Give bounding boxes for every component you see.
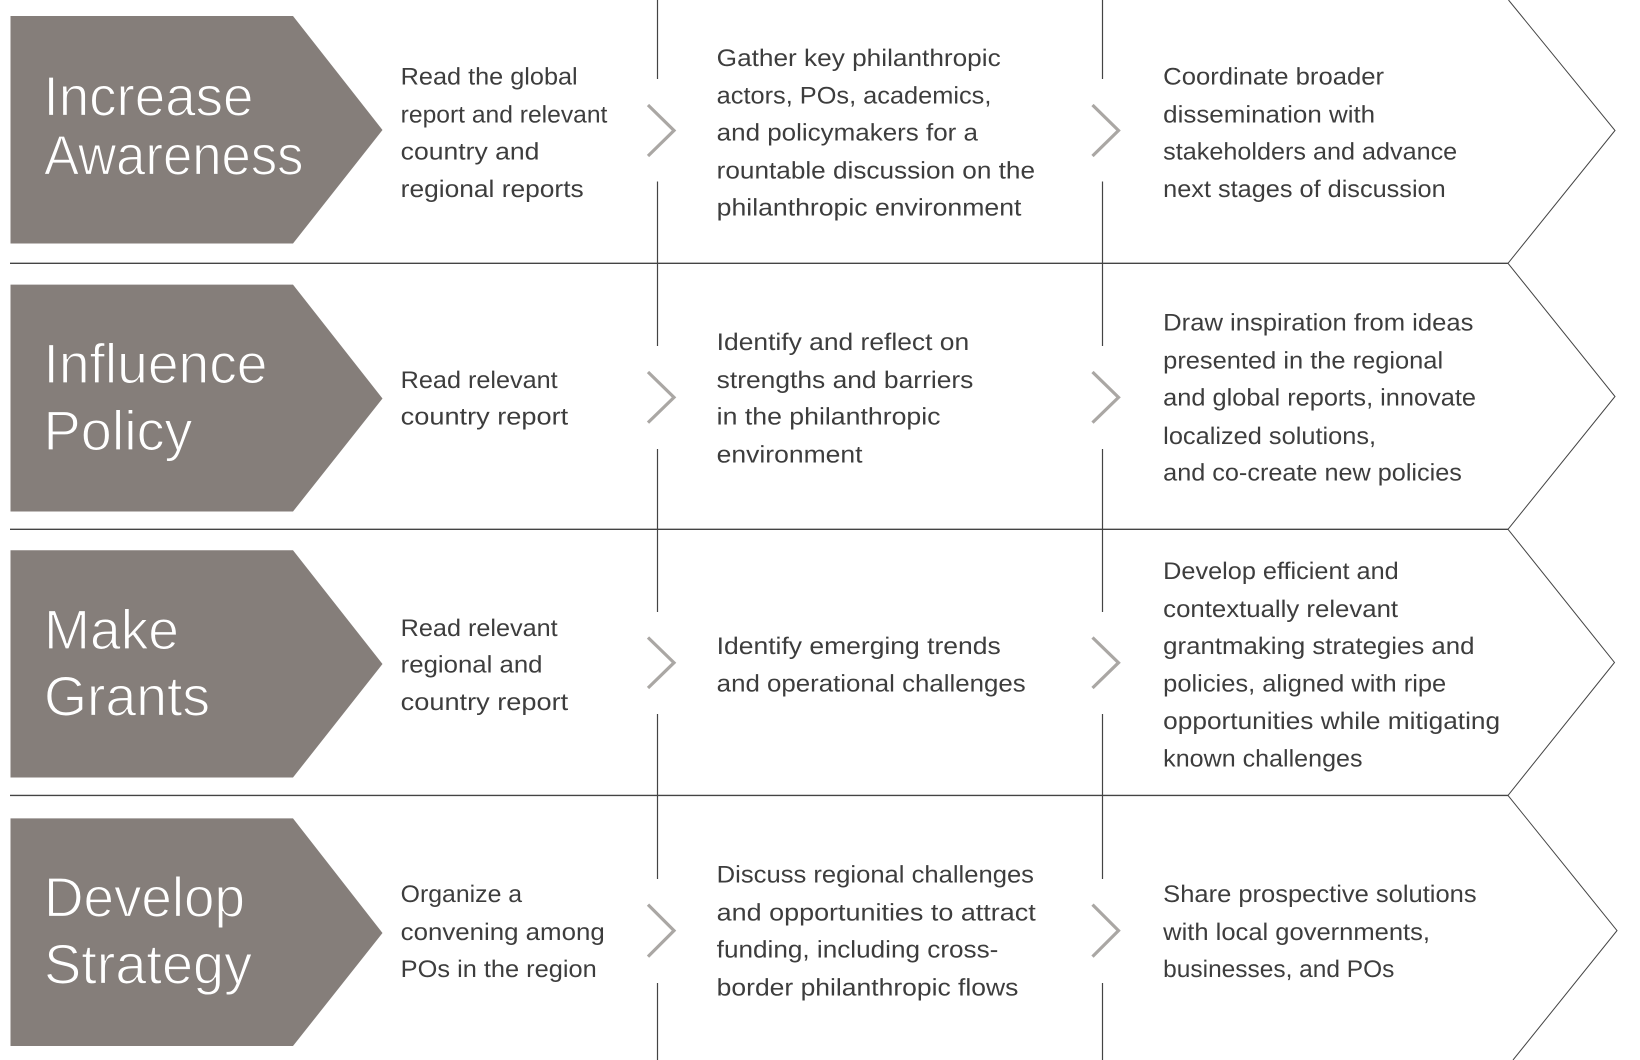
arrow: step one to two (648, 105, 674, 156)
text: step three: and co-create new policies (1163, 459, 1462, 486)
label: Influence Policy: Policy (44, 399, 192, 462)
arrow: step one to two (648, 372, 674, 423)
text: step three: Draw inspiration from ideas (1163, 310, 1473, 337)
text: step two (717, 633, 1026, 698)
text: step one: convening among (401, 919, 605, 946)
text: step three: known challenges (1163, 746, 1362, 773)
label: Make Grants: Make (44, 598, 179, 661)
text: step two: Discuss regional challenges (717, 862, 1034, 889)
text: step three: stakeholders and advance (1163, 139, 1457, 166)
outline arrow: row two (1508, 263, 1615, 529)
text: step two (717, 329, 973, 468)
label: Increase Awareness: Awareness (44, 124, 304, 187)
text: step one: country report (401, 403, 569, 430)
text: step two: rountable discussion on the (717, 158, 1035, 184)
row: Increase Awareness (10, 0, 1615, 263)
label: Develop Strategy: Strategy (44, 933, 252, 996)
outline arrow: row one (1508, 0, 1615, 263)
arrow: step two to three (1092, 105, 1118, 156)
text: step three (1163, 64, 1457, 203)
label: Increase Awareness: Increase (44, 64, 254, 127)
text: step one: Read relevant (401, 367, 558, 394)
text: step one: POs in the region (401, 956, 597, 983)
text: step three: and global reports, innovate (1163, 385, 1476, 412)
text: step one (401, 367, 569, 430)
text: step three (1163, 558, 1500, 773)
text: step two (717, 862, 1036, 1002)
label: Influence Policy: Influence (44, 332, 268, 395)
text: step two: and operational challenges (717, 671, 1026, 698)
outline arrow: row four (1508, 795, 1617, 1060)
row: Make Grants (10, 529, 1614, 795)
text: step three: policies, aligned with ripe (1163, 671, 1446, 698)
label: Make Grants: Grants (44, 665, 210, 728)
text: step two: philanthropic environment (717, 195, 1022, 222)
text: step two: in the philanthropic (717, 404, 940, 431)
text: step three: grantmaking strategies and (1163, 633, 1474, 660)
text: step two: Gather key philanthropic (717, 45, 1001, 72)
text: step three: opportunities while mitigating (1163, 708, 1500, 735)
text: step one: Read the global (401, 64, 578, 90)
text: step one: country and (401, 139, 539, 166)
text: step one: regional and (401, 652, 542, 679)
text: step two: and policymakers for a (717, 120, 979, 147)
row: Develop Strategy (10, 795, 1617, 1060)
text: step three: dissemination with (1163, 101, 1375, 128)
text: step three: contextually relevant (1163, 596, 1398, 623)
text: step three: businesses, and POs (1163, 956, 1394, 983)
text: step two: environment (717, 442, 863, 468)
text: step three (1163, 310, 1476, 486)
label: Develop Strategy: Develop (44, 866, 245, 929)
text: step three (1162, 881, 1477, 983)
arrow: step two to three (1092, 905, 1118, 957)
text: step one (401, 881, 605, 983)
text: step three: Share prospective solutions (1163, 881, 1477, 908)
arrow: step one to two (648, 638, 674, 688)
label: Influence Policy (10, 285, 382, 512)
text: step one (401, 615, 569, 716)
label: Develop Strategy (10, 818, 382, 1046)
label: Increase Awareness (10, 16, 382, 244)
arrow: step one to two (648, 905, 674, 957)
text: step two: funding, including cross- (717, 936, 998, 963)
outline arrow: row three (1508, 529, 1614, 795)
text: step three: Develop efficient and (1163, 558, 1399, 585)
label: Make Grants (10, 550, 382, 778)
text: step two: strengths and barriers (717, 367, 973, 394)
text: step three: Coordinate broader (1163, 64, 1384, 90)
text: step two: and opportunities to attract (717, 900, 1036, 927)
text: step three: next stages of discussion (1163, 176, 1446, 203)
text: step two: actors, POs, academics, (717, 82, 991, 110)
text: step one: report and relevant (401, 101, 608, 128)
text: step one: country report (401, 689, 569, 716)
text: step one: Read relevant (401, 615, 558, 642)
text: step two (717, 45, 1035, 222)
text: step three: presented in the regional (1163, 348, 1443, 374)
text: step two: Identify and reflect on (717, 329, 969, 356)
text: step one: regional reports (401, 176, 584, 203)
arrow: step two to three (1092, 372, 1118, 423)
text: step two: Identify emerging trends (717, 633, 1001, 660)
text: step one: Organize a (401, 881, 523, 908)
row: Influence Policy (10, 263, 1615, 529)
text: step three: with local governments, (1162, 919, 1430, 946)
text: step three: localized solutions, (1163, 423, 1376, 450)
text: step one (401, 64, 608, 203)
text: step two: border philanthropic flows (717, 975, 1018, 1002)
arrow: step two to three (1092, 638, 1118, 688)
